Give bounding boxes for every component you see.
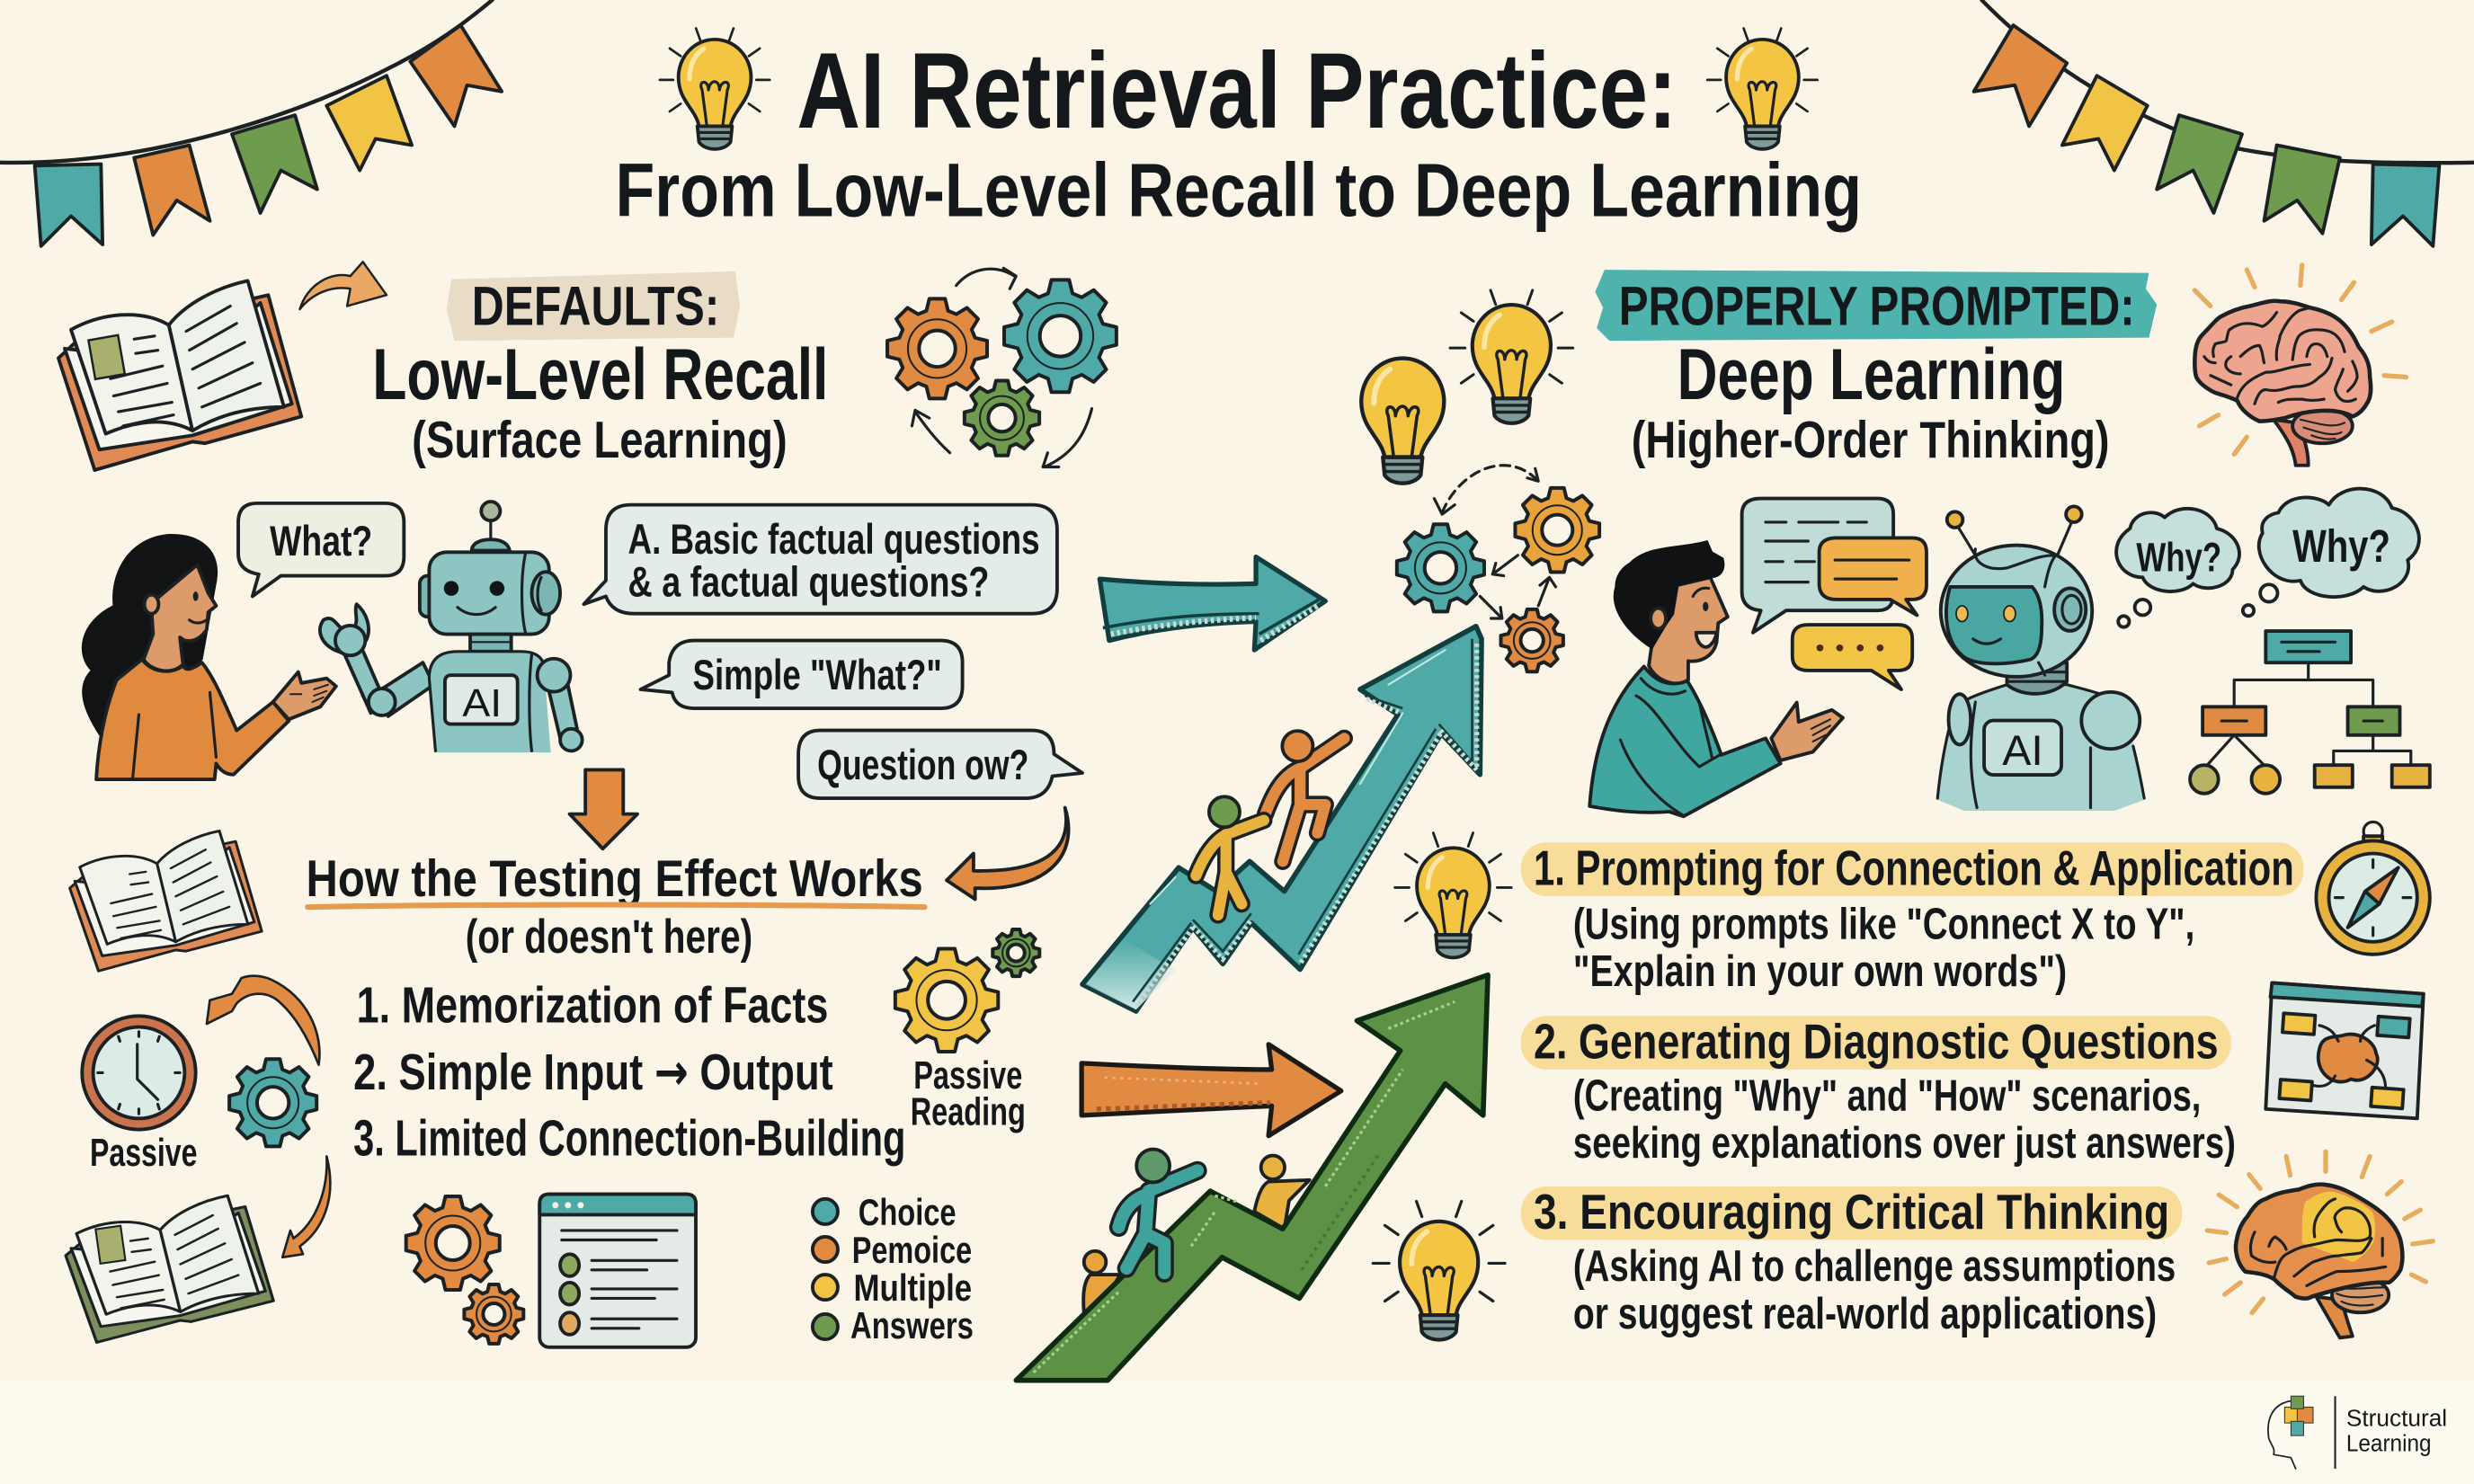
speech bubble: teal notes <box>1742 499 1893 633</box>
icon: list bulb upper <box>1395 833 1511 957</box>
text: item 1 detail: (Using prompts like "Connect X to Y", <box>1573 900 2194 948</box>
arrow: teal growth <box>1082 626 1482 1011</box>
icon: mind map card <box>2265 982 2424 1118</box>
thought cloud: why small <box>2116 509 2239 627</box>
speech bubble: what: What? <box>270 518 372 565</box>
icon: bulb with rays <box>1450 290 1573 423</box>
divider <box>2335 1396 2336 1469</box>
bunting: right <box>1974 0 2474 246</box>
bunting: left <box>0 0 502 246</box>
text: item 3 detail <box>1573 1242 2176 1338</box>
list: low-level items: 3. Limited Connection-Building <box>353 1110 905 1167</box>
speech bubble: simple what: Simple "What?" <box>692 652 942 699</box>
icon: title bulb right <box>1707 28 1818 149</box>
figure: yellow climber <box>1196 796 1264 915</box>
logo: structural learning <box>2268 1396 2447 1469</box>
legend: Multiple <box>854 1266 972 1309</box>
list: low-level items: 2. Simple Input → Output <box>353 1044 833 1102</box>
icon: small green gear <box>992 929 1039 976</box>
arrow: orange right <box>1081 1044 1341 1136</box>
list: low-level items: 1. Memorization of Facts <box>357 976 828 1033</box>
icon: clock <box>82 1016 196 1130</box>
icon: connected gears <box>1397 466 1599 671</box>
icon: three gears <box>887 268 1117 467</box>
figure: orange climber <box>1266 731 1344 861</box>
legend: Choice <box>859 1191 957 1233</box>
heading: defaults: DEFAULTS: <box>472 276 719 338</box>
panel: deep learning list <box>1373 822 2433 1340</box>
legend <box>813 1191 974 1346</box>
heading: deep learning: Deep Learning <box>1678 334 2065 415</box>
arrow: orange arch <box>207 976 319 1065</box>
arrow: teal right <box>1099 557 1325 650</box>
robot <box>320 502 583 752</box>
woman <box>83 535 336 779</box>
robot: AI <box>462 681 502 725</box>
panel: testing effect <box>66 831 1039 1347</box>
subheading: surface learning: (Surface Learning) <box>412 412 788 469</box>
man <box>1589 541 1843 816</box>
icon: teal gear <box>229 1059 316 1146</box>
text: item 2 detail: (Creating "Why" and "How" scenarios, <box>1573 1072 2201 1121</box>
heading: testing effect: How the Testing Effect Works <box>307 850 923 908</box>
label: passive: Passive <box>90 1131 197 1175</box>
icon: curved arrow <box>299 262 387 309</box>
title: AI Retrieval Practice: <box>796 31 1678 151</box>
highlight: defaults <box>447 271 740 341</box>
icon: yellow gear <box>895 948 998 1052</box>
icon: book middle <box>70 831 262 971</box>
panel: low-level recall scene <box>83 502 1325 899</box>
subheading: higher-order thinking: (Higher-Order Thinking) <box>1632 412 2110 469</box>
text: item 3 detail: or suggest real-world applications) <box>1573 1290 2157 1338</box>
flowchart <box>2190 631 2430 794</box>
speech bubble: question <box>798 731 1082 798</box>
arrow: green growth <box>1016 975 1488 1381</box>
subheading: (or doesn't here) <box>466 911 752 964</box>
heading: properly prompted: PROPERLY PROMPTED: <box>1619 276 2135 338</box>
icon: open book top <box>58 280 301 470</box>
speech bubble: basic factual questions: A. Basic factual questions <box>628 516 1040 564</box>
icon: logo head <box>2268 1396 2313 1469</box>
text: item 2 detail <box>1573 1072 2236 1168</box>
panel: deep learning scene <box>1589 489 2430 816</box>
speech bubble: what <box>238 503 404 596</box>
highlight: item 1 <box>1521 842 2303 896</box>
robot with antennae <box>1937 506 2144 811</box>
arrow: orange curved left <box>947 808 1069 899</box>
speech bubble: question: Question ow? <box>817 742 1028 789</box>
icon: book lower <box>66 1195 273 1342</box>
underline <box>307 905 924 907</box>
text: item 3 detail: (Asking AI to challenge assumptions <box>1573 1242 2176 1291</box>
legend: Pemoice <box>852 1229 972 1271</box>
speech bubble: orange lines <box>1820 538 1927 615</box>
highlight: properly prompted <box>1595 270 2157 341</box>
heading: low-level recall: Low-Level Recall <box>372 334 828 415</box>
text: logo: Structural <box>2346 1405 2447 1432</box>
highlight: item 2 <box>1521 1016 2231 1070</box>
arrow: orange down <box>570 769 637 849</box>
list: low-level items <box>353 976 905 1167</box>
legend: Answers <box>850 1304 974 1346</box>
figure: teal climber <box>1118 1150 1197 1273</box>
figure: yellow helper left <box>1083 1251 1120 1322</box>
text: logo <box>2346 1405 2447 1457</box>
icon: quiz window <box>539 1195 696 1347</box>
icon: brain orange <box>2207 1151 2433 1337</box>
text: item 1 detail <box>1573 900 2194 996</box>
speech bubble: yellow dots <box>1793 625 1912 689</box>
label: passive reading: Passive <box>913 1053 1022 1097</box>
label: passive reading <box>911 1053 1026 1133</box>
panel: properly prompted header <box>1361 265 2407 484</box>
figure: yellow helper right <box>1254 1156 1310 1229</box>
arrow: orange thin down <box>282 1156 330 1257</box>
icon: bulb plain <box>1361 359 1444 484</box>
label: passive reading: Reading <box>911 1089 1026 1133</box>
icon: title bulb left <box>660 28 770 149</box>
icon: list bulb lower <box>1373 1202 1505 1340</box>
thought cloud: why large <box>2243 489 2419 616</box>
thought cloud: why large: Why? <box>2292 520 2390 572</box>
speech bubble: basic factual questions: & a factual questions? <box>628 558 989 606</box>
icon: compass <box>2316 822 2430 955</box>
highlight: item 3 <box>1521 1186 2182 1240</box>
text: logo: Learning <box>2346 1430 2432 1457</box>
icon: orange gears <box>406 1196 523 1344</box>
speech bubble: basic factual questions <box>583 505 1057 614</box>
thought cloud: why small: Why? <box>2136 534 2221 580</box>
text: item 2 detail: seeking explanations over just answers) <box>1573 1119 2236 1168</box>
heading: item 2: 2. Generating Diagnostic Questions <box>1534 1015 2219 1070</box>
icon: brain pink <box>2194 265 2407 466</box>
text: item 1 detail: "Explain in your own words") <box>1573 947 2067 996</box>
subtitle: From Low-Level Recall to Deep Learning <box>616 147 1862 232</box>
speech bubble: simple what <box>641 641 963 708</box>
panel: defaults header <box>58 262 1117 470</box>
heading: item 3: 3. Encouraging Critical Thinking <box>1534 1185 2169 1240</box>
robot with antennae: AI <box>2002 727 2043 775</box>
